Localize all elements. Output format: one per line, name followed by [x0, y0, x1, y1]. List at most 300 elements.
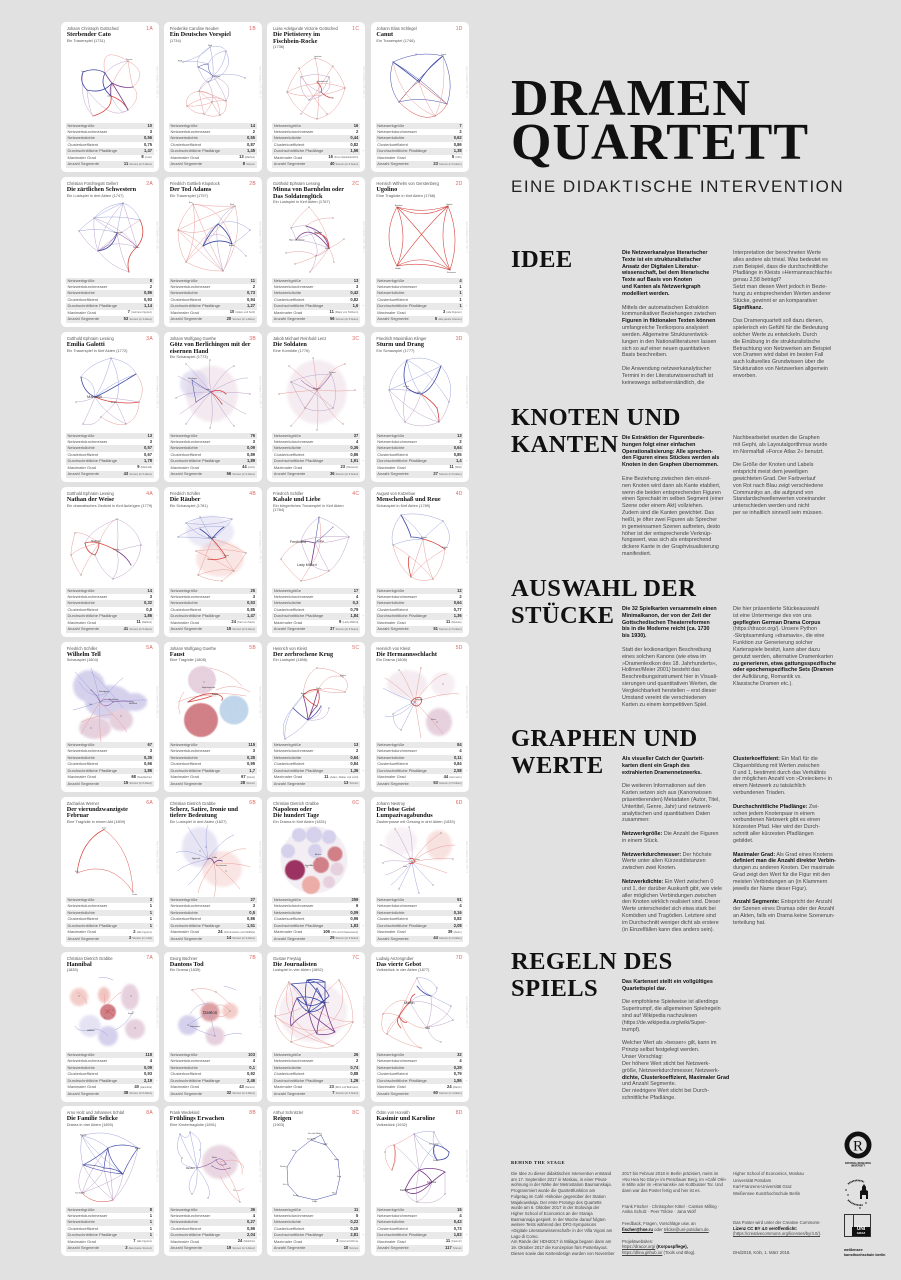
logo: Uni Graz: GRAZ	[857, 1230, 865, 1234]
values table: Clusterkoeffizient	[274, 452, 304, 457]
values table: 1,47	[144, 148, 152, 153]
network graph: Scipio	[128, 1012, 133, 1014]
text: Auswahl column 1: Beschreibungsinstrument hier in Visuali-	[622, 674, 718, 680]
card 7D	[371, 952, 469, 1102]
network graph: Juba	[107, 96, 112, 98]
text: Auswahl column 2: -Skriptsammlung »dramavis«, die eine	[733, 633, 824, 639]
text: feedback	[622, 1221, 710, 1232]
network graph: Ferdinand	[290, 540, 306, 544]
values table: Clusterkoeffizient	[377, 452, 408, 457]
text: licence: Das Poster wird unter der Creative Commons-	[733, 1220, 820, 1225]
card code: 4A	[146, 491, 153, 497]
side note: Autor & Struktur 1770–1789 · C	[362, 531, 364, 563]
network graph: Trude	[132, 892, 137, 896]
values table: 1,78	[144, 458, 152, 463]
values table: Netzwerkdichte	[377, 445, 405, 450]
text: Knoten column 1: in gemeinsamen Szenen auftreten, desto	[622, 524, 720, 530]
text: Graphen column 1: den Knoten wirklich realisiert sind. Dieser	[622, 899, 720, 905]
values table: Netzwerkdurchmesser	[170, 748, 210, 753]
card 5A	[61, 642, 159, 792]
side note: Autor & Struktur 1880–1932 · B	[258, 1150, 260, 1182]
values table: Durchschnittliche Pfadlänge	[170, 923, 220, 928]
text: Idee column 2	[733, 250, 832, 380]
values table: Netzwerkgröße	[274, 1052, 301, 1057]
text: Graphen column 1: Untertitel, Genre, Jahr) und netzwerk-	[622, 804, 712, 810]
values table: 24 (Schulmeister und Mollfels)	[218, 929, 255, 934]
author: Frank Wedekind	[170, 1110, 199, 1115]
values table: 0,35	[247, 755, 255, 760]
card 1B	[164, 22, 262, 172]
text: Idee column 1: und Kanten als Netzwerkgraph	[622, 284, 701, 290]
values table: Clusterkoeffizient	[170, 607, 201, 612]
subtitle: Schauspiel in fünf Akten (1789)	[376, 503, 430, 508]
values table: 5 Akte (keine Szenen)	[435, 316, 462, 321]
values table: Anzahl Segmente	[377, 936, 409, 941]
play title: Kasimir und Karoline	[376, 1115, 435, 1122]
author: Johann Christoph Gottsched	[67, 26, 119, 31]
values table: Netzwerkdurchmesser	[377, 284, 417, 289]
card code: 6C	[352, 800, 359, 806]
author: Johann Elias Schlegel	[376, 26, 417, 31]
text: Idee column 2: auch kulturelles Grundwissen über die	[733, 359, 824, 365]
values table: 0,93	[144, 1071, 152, 1076]
values table: Netzwerkdichte	[68, 445, 95, 450]
values table: 40 (Hannibal)	[134, 1084, 152, 1089]
values table: Maximaler Grad	[377, 620, 406, 625]
values table	[376, 588, 468, 633]
values table: 14	[147, 588, 152, 592]
values table: 1,83	[350, 923, 358, 928]
text: licence: (https://creativecommons.org/licenses/by/4.0/).	[733, 1231, 821, 1236]
side note: Autor & Struktur 1730–1768 · C	[362, 66, 364, 98]
text: Knoten column 1: nen Knoten wird dann als Kante etabliert,	[622, 483, 720, 489]
text: Auswahl column 1: sierungen und quantitativen Werten, die	[622, 681, 717, 687]
text: Auswahl column 2: Funktion zur Generierung solcher	[733, 640, 813, 646]
values table: Durchschnittliche Pfadlänge	[170, 768, 220, 773]
values table: 0,09	[247, 445, 255, 450]
values table: 0,42	[350, 290, 358, 295]
play title	[170, 806, 238, 820]
text: Auswahl column 1: Minimalkanon, der von der Zeit der	[622, 613, 711, 619]
side note: Autor & Struktur 1800–1835 · C	[362, 840, 364, 873]
text: websites: Projektwebsites:	[622, 1238, 653, 1244]
values table: Netzwerkgröße	[377, 1052, 404, 1057]
values table: 0,86	[454, 142, 462, 147]
text: Knoten column 2: Nachbearbeitet wurden die Graphen	[733, 435, 820, 441]
text: Idee column 1: keineswegs selbstverständlich, die	[622, 380, 704, 386]
values table: 56 Szenen (in 5 Akten)	[227, 471, 255, 476]
subtitle: Volksstück in vier Akten (1877)	[376, 967, 429, 972]
values table: 1,26	[350, 1078, 358, 1083]
network graph: Julchen	[133, 247, 140, 249]
network graph	[61, 952, 159, 1102]
text: Idee column 2: spielerisch ein Gefühl für die Bedeutung	[733, 325, 828, 331]
values table: 2	[150, 284, 152, 289]
values table: 4	[356, 594, 358, 599]
values table: Durchschnittliche Pfadlänge	[377, 1232, 427, 1237]
text: Graphen column 1: extrahierten Dramennetzwerks.	[622, 770, 702, 776]
card 1A	[61, 22, 159, 172]
network graph: Saladin	[113, 549, 119, 551]
values table: Anzahl Segmente	[274, 626, 305, 631]
values table: Clusterkoeffizient	[170, 297, 201, 302]
values table: 25	[250, 588, 255, 592]
text: Knoten column 2: unterschieden werden und nicht	[733, 503, 809, 509]
card code: 7A	[146, 955, 153, 961]
text: Knoten column 1: hungen folgt einer einfachen	[622, 442, 695, 448]
text: Knoten column 1: heißt, je öfter zwei Figuren als Sprecher	[622, 517, 717, 523]
values table: Clusterkoeffizient	[170, 1071, 201, 1076]
values table: Clusterkoeffizient	[274, 607, 304, 612]
values table: Netzwerkdurchmesser	[377, 748, 417, 753]
text: Graphen column 1: Komödien und Tragödien. Letztere sind	[622, 913, 716, 919]
values table: 0,16	[454, 910, 462, 915]
values table	[272, 1052, 360, 1097]
text: credits column 1: Majakowskaja. Der erste Prototyp des Quartetts	[511, 1200, 602, 1205]
text: Idee column 2: Pfadlänge in Kleists »Hermannsschlacht«	[733, 270, 832, 276]
side note: Autor & Struktur 1740–1768 · D	[465, 221, 467, 253]
network graph: Faust	[212, 692, 218, 696]
logo: HSE: UNIVERSITY	[851, 1165, 866, 1168]
values table: 0,09	[350, 910, 358, 915]
values table: 41 Szenen (in 5 Akten)	[124, 626, 152, 631]
values table: Maximaler Grad	[274, 155, 302, 160]
card 6B	[164, 796, 262, 946]
values table: 0,09	[144, 1065, 152, 1070]
card code: 5B	[249, 645, 256, 651]
values table: Netzwerkdichte	[274, 290, 301, 295]
values table: Clusterkoeffizient	[170, 761, 201, 766]
values table: Netzwerkdichte	[170, 135, 198, 140]
logo: Universität Potsdam	[842, 1175, 876, 1211]
values table: Clusterkoeffizient	[377, 1226, 408, 1231]
text: authors: Frank Fischer · Christopher Kittel · Carsten Milling ·	[622, 1204, 719, 1208]
values table: Netzwerkgröße	[170, 742, 198, 747]
text: Graphen column 1: Netzwerkgröße: Die Anzahl der Figuren	[622, 831, 718, 837]
values table: Netzwerkgröße	[170, 1206, 198, 1212]
values table: Netzwerkdichte	[170, 910, 198, 915]
text: Auswahl column 1: Karten zu einem kompetitiven Spiel.	[622, 702, 708, 708]
text: credits column 1: am 17. September 2017 in Moskau, in einer Privat-	[511, 1177, 607, 1182]
play title: Der zerbrochene Krug	[273, 650, 333, 658]
values table: Clusterkoeffizient	[170, 916, 201, 921]
text: Auswahl column 2: oder epochenspezifische Sets (Dramen	[733, 667, 833, 673]
author: Gotthold Ephraim Lessing	[273, 181, 320, 186]
values table: 0,87	[247, 142, 255, 147]
card code: 1C	[352, 26, 359, 32]
network graph: Stube	[293, 1194, 298, 1197]
author: Christian Dietrich Grabbe	[170, 800, 216, 806]
network graph: Minna	[325, 248, 331, 250]
values table	[66, 742, 158, 787]
card 3D	[371, 332, 469, 482]
values table: 1,86	[454, 1078, 462, 1083]
values table: 39 (Zwirn)	[448, 929, 462, 934]
text: Graphen column 2: meisten Verbindungen an (in Klammern	[733, 879, 827, 885]
text: Knoten column 1: Szene oder einem Akt) vollziehen.	[622, 503, 703, 509]
values table: Anzahl Segmente	[170, 626, 202, 631]
network graph: Porcius	[126, 58, 132, 61]
card 8D	[371, 1106, 469, 1256]
values table	[272, 897, 360, 942]
values table: 0,66	[144, 761, 152, 766]
values table: 60 Szenen (in 4 Akten)	[433, 1090, 462, 1095]
card code: 6A	[146, 800, 153, 806]
author: Heinrich Wilhelm von Gerstenberg	[376, 181, 439, 186]
values table: Netzwerkgröße	[68, 1206, 95, 1212]
values table: 1,38	[454, 148, 462, 153]
main title: QUARTETT	[511, 114, 809, 171]
values table: Durchschnittliche Pfadlänge	[377, 613, 427, 618]
network graph: Schürzinger	[429, 1142, 439, 1146]
values table: Anzahl Segmente	[68, 936, 99, 941]
card 3A	[61, 332, 159, 482]
heading: Idee: IDEE	[511, 246, 573, 272]
values table: Netzwerkdichte	[377, 755, 405, 760]
author: Gustav Freytag	[273, 956, 301, 960]
values table	[169, 278, 261, 323]
text: Graphen column 2: einem Netzwerk zu tatsächlich	[733, 783, 806, 789]
values table: 28 Szenen	[240, 780, 255, 785]
side note: Autor & Struktur 1800–1835 · A	[156, 840, 158, 872]
values table	[272, 742, 360, 787]
network graph: Walter	[316, 686, 322, 690]
card code: 3C	[352, 336, 359, 342]
values table: 4	[356, 439, 358, 444]
network graph: Karl Moor	[208, 536, 217, 539]
network graph: La Feu	[403, 386, 409, 388]
values table: 2,08	[454, 923, 462, 928]
values table	[376, 897, 463, 942]
network graph: Götz	[206, 388, 210, 391]
author: Christian Dietrich Grabbe	[67, 956, 113, 960]
text: Idee column 1: umfangreiche Textkorpora analysiert	[622, 325, 709, 331]
heading: Regeln des Spiels: SPIELS	[511, 975, 598, 1002]
play title: Die Pietisterey im	[273, 31, 320, 38]
values table: 7	[459, 122, 462, 128]
text: Graphen column 1: zwischen zwei Knoten.	[622, 865, 676, 871]
values table: 10 Szenen	[344, 1245, 358, 1250]
author: Georg Büchner	[170, 956, 197, 960]
values table	[376, 122, 468, 168]
values table: 106 (Vitri und Chassecoeur)	[323, 929, 358, 934]
values table	[272, 278, 364, 323]
card code: 8C	[352, 1110, 359, 1116]
text: Auswahl column 1: bis in die Moderne reicht (ca. 1730	[622, 626, 710, 632]
values table: Anzahl Segmente	[274, 161, 305, 166]
author: Friedrich Maximilian Klinger	[376, 336, 427, 341]
network graph: Mephistopheles	[202, 686, 215, 688]
values table: Netzwerkgröße	[274, 278, 301, 282]
play title: Ugolino	[376, 186, 397, 193]
text: Knoten column 1: Die Extraktion der Figurenbezie-	[622, 435, 704, 441]
values table: 1	[150, 1226, 152, 1231]
values table: Netzwerkgröße	[68, 432, 95, 438]
values table: 4	[150, 1058, 152, 1063]
values table: 7 Szenen (in 4 Akten)	[332, 1090, 358, 1095]
text: credits column 1: Dieses sowie das Kartendesign wurden von November	[511, 1251, 615, 1256]
text: Auswahl column 1: Gottschedischen Theaterreformen	[622, 620, 710, 626]
values table	[376, 432, 468, 478]
network graph: Rattengift	[192, 856, 201, 860]
text: websites: https://dracor.org/ (Korpuspflege),	[622, 1244, 688, 1249]
side note: Autor & Struktur 1740–1768 · B	[258, 221, 260, 253]
values table: Clusterkoeffizient	[68, 607, 98, 612]
text: Idee column 2: Setzt man diesen Wert jedoch in Bezie-	[733, 284, 827, 290]
values table: 0,11	[454, 755, 462, 760]
text: Auswahl column 2: zu generieren, etwa gattungsspezifische	[733, 661, 836, 667]
network graph: Eva	[189, 202, 193, 204]
network graph: Herr	[332, 1192, 336, 1194]
values table: 2	[356, 129, 358, 134]
text: Graphen column 1: und 1, der darüber Auskunft gibt, wie viele	[622, 886, 722, 892]
values table: Durchschnittliche Pfadlänge	[377, 458, 427, 463]
subtitle: Eine Komödie (1776)	[273, 348, 310, 353]
network graph	[72, 668, 148, 742]
subtitle: Ein Lustspiel (1808)	[273, 657, 307, 662]
values table: 0,86	[144, 290, 152, 295]
values table: 8 (Cato)	[141, 154, 152, 159]
logo: HSE: NATIONAL RESEARCH	[845, 1162, 871, 1165]
card 6D	[371, 796, 469, 946]
values table: 103	[248, 1052, 255, 1057]
values table: Netzwerkdurchmesser	[170, 1058, 210, 1063]
text: Regeln: sind auf Wikipedia nachzulesen	[622, 1013, 697, 1019]
text: Graphen column 1: Als visueller Catch der Quartett-	[622, 756, 704, 762]
card 6A	[61, 796, 159, 946]
values table: 7 (mehrere Figuren)	[128, 309, 152, 314]
values table: 1,91	[350, 458, 358, 463]
text: Graphen column 2: definiert man die Anzahl direkter Verbin-	[733, 858, 836, 864]
values table: 1,4	[456, 458, 462, 463]
values table: Durchschnittliche Pfadlänge	[377, 923, 427, 928]
values table: 7 (alle Figuren)	[133, 1238, 152, 1243]
network graph: Liddy	[212, 856, 218, 858]
values table: Anzahl Segmente	[170, 936, 202, 941]
values table: 67 (Faust)	[241, 774, 255, 779]
network graph: Major von Tellheim	[289, 238, 305, 242]
network graph: Melchthal	[129, 702, 138, 704]
side note: Autor & Struktur 1770–1789 · B	[258, 531, 260, 563]
values table: Durchschnittliche Pfadlänge	[170, 458, 220, 463]
text: feedback: fischer@hse.ru oder trilcke@uni-potsdam.de.	[622, 1227, 710, 1232]
text: process end: dann war das Poster fertig und hier ist es.	[622, 1188, 701, 1193]
text: Idee column 1: Die Anwendung netzwerkanalytischer	[622, 366, 711, 372]
values table: Netzwerkdichte	[68, 1065, 95, 1070]
network graph	[61, 796, 159, 946]
play title	[273, 31, 320, 44]
values table: Maximaler Grad	[377, 155, 406, 160]
values table: 1	[459, 303, 462, 308]
card code: 1A	[146, 26, 153, 32]
values table: 0,94	[247, 297, 255, 302]
text: Auswahl column 1: Vergleichbarkeit herstellen – erst dieser	[622, 688, 716, 694]
play title: Die Journalisten	[273, 960, 317, 968]
values table: Netzwerkdurchmesser	[274, 903, 314, 908]
values table: 11 (Wild)	[449, 464, 462, 469]
card code: 8D	[456, 1110, 463, 1116]
card code: 2B	[249, 181, 256, 187]
values table: 0,3	[353, 600, 358, 605]
author: Heinrich von Kleist	[273, 646, 307, 650]
values table: 3 (Graf und Dirne)	[336, 1238, 358, 1243]
card 3C	[267, 332, 365, 482]
values table: Maximaler Grad	[170, 155, 199, 160]
network graph	[286, 206, 344, 272]
card code: 3B	[249, 336, 256, 342]
side note: Autor & Struktur 1730–1768 · D	[465, 66, 467, 98]
network graph: Mathes	[214, 75, 220, 78]
text: Idee column 2: von Dramen wird dabei im besten Fall	[733, 352, 823, 358]
values table: Netzwerkgröße	[274, 1206, 301, 1212]
values table	[376, 1052, 463, 1097]
values table: 3 Szenen (in 1 Akt)	[129, 935, 152, 940]
values table: 26	[354, 1052, 358, 1057]
values table: Clusterkoeffizient	[68, 761, 98, 766]
values table: 0,36	[350, 445, 358, 450]
values table: 13 (Mathes)	[239, 154, 255, 159]
values table: 1,7	[249, 768, 255, 773]
values table: Maximaler Grad	[170, 774, 199, 779]
values table: 3	[356, 284, 358, 289]
text: process end: »No Hea No Glory« im Prenzlauer Berg, im »Café Olé«	[622, 1177, 727, 1182]
text: Graphen column 2: Maximaler Grad: Als Grad eines Knotens	[733, 852, 833, 858]
play title: Fischbein-Rocke	[273, 38, 317, 44]
values table: 2	[459, 439, 462, 444]
network graph: Schulmeister	[216, 864, 227, 866]
values table: Netzwerkdurchmesser	[68, 748, 107, 753]
play title: Napoleon oder	[273, 806, 312, 812]
values table: 24 (Melchior)	[238, 1238, 255, 1243]
values table: 14 Szenen (in 3 Akten)	[227, 935, 255, 940]
play title: Die zärtlichen Schwestern	[67, 186, 136, 193]
network graph: Stolzius	[329, 371, 336, 374]
values table: Anzahl Segmente	[68, 161, 99, 166]
text: Graphen column 2: terteilung hat.	[733, 920, 766, 926]
values table: 27	[250, 897, 255, 902]
network graph: Adam	[229, 244, 234, 247]
values table: 11 (Adam, Walter und Licht)	[324, 774, 358, 779]
values table: Maximaler Grad	[274, 1239, 302, 1244]
play title	[67, 806, 128, 820]
values table: 3 Akte (keine Szenen)	[125, 1245, 152, 1250]
values table: Netzwerkdichte	[170, 600, 198, 605]
text: Graphen column 2: schnitt aller kürzesten Pfadlängen	[733, 831, 814, 837]
heading: Knoten und Kanten: KANTEN	[511, 431, 619, 458]
values table: 1,51	[247, 923, 255, 928]
values table: Anzahl Segmente	[377, 161, 409, 166]
values table: Anzahl Segmente	[377, 1245, 409, 1250]
text: Auswahl column 2: Klassische Dramen etc.).	[733, 681, 793, 687]
main title	[511, 77, 809, 165]
values table: Anzahl Segmente	[68, 316, 99, 321]
values table: 76	[250, 432, 255, 438]
network graph	[267, 1106, 365, 1256]
text: authors: Anika Schulz · Peer Trilcke · Jana Wolf	[622, 1209, 696, 1214]
card 5D	[371, 642, 469, 792]
network graph: Moritz	[212, 1156, 217, 1159]
values table: 2 (alle Figuren)	[133, 929, 152, 934]
network graph	[388, 358, 451, 426]
subtitle: (1784)	[273, 507, 284, 512]
play title	[376, 806, 433, 820]
card code: 2A	[146, 181, 153, 187]
logo: Weißensee	[844, 1248, 885, 1257]
text: Idee column 1: Texte auf Basis von Knoten	[622, 277, 692, 283]
values table: 118	[145, 1052, 152, 1057]
heading: Graphen und Werte	[511, 725, 698, 779]
values table: 8	[150, 278, 152, 282]
